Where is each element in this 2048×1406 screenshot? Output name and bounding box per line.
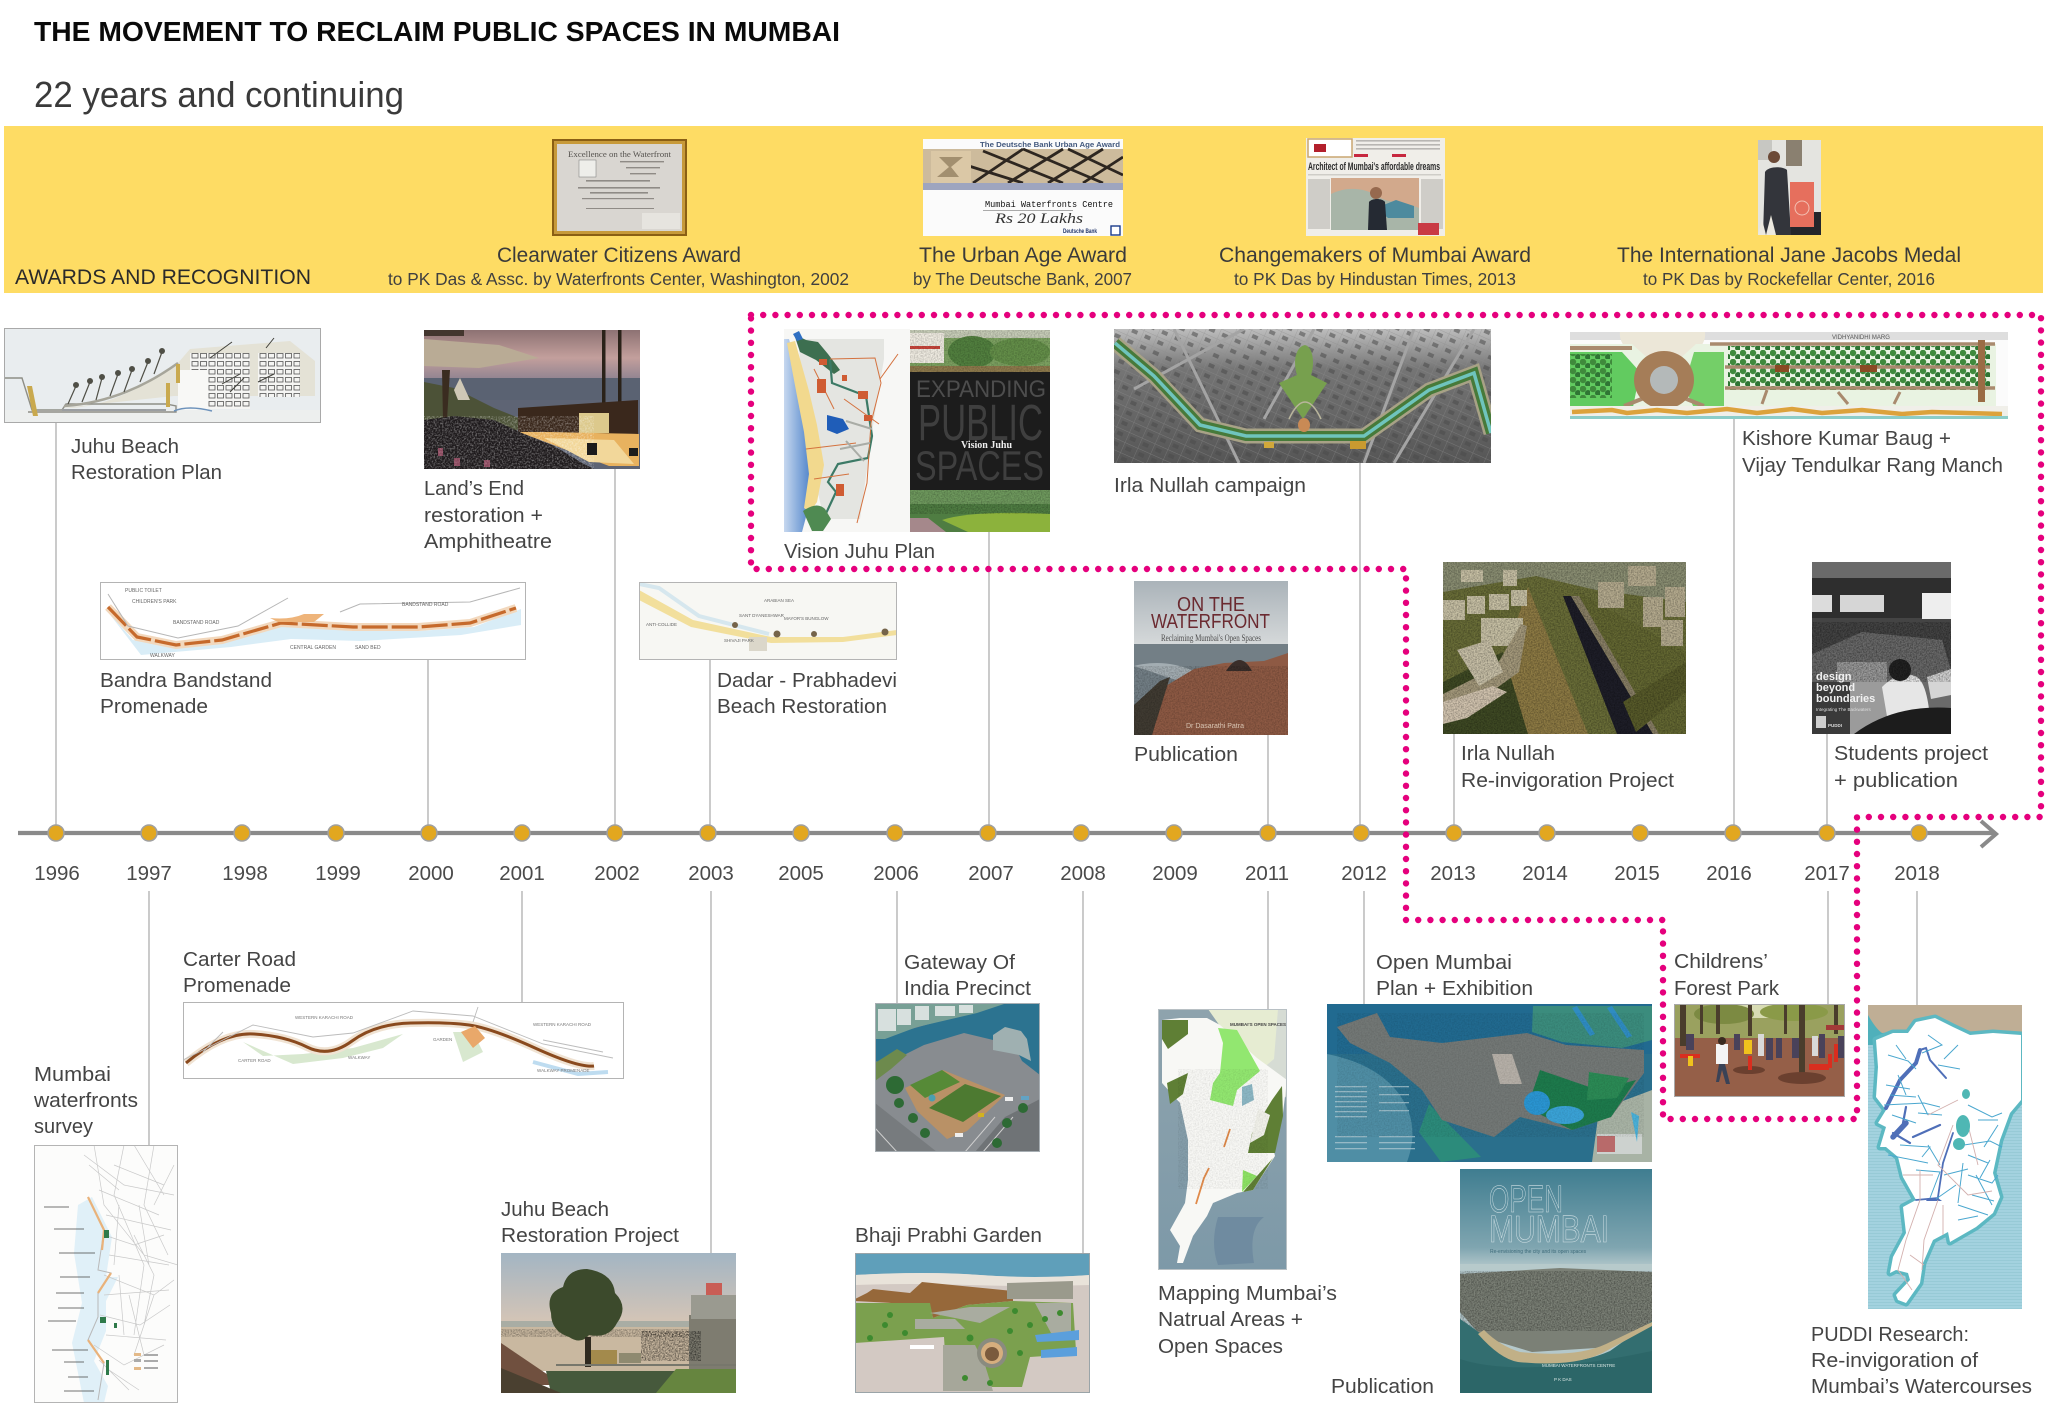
label: juhu beach restoration project [501, 1198, 679, 1247]
image: design beyond boundaries cover: Integrating The Backwaters [1816, 707, 1871, 712]
label: open mumbai plan + exhibition: Plan + Exhibition [1376, 977, 1533, 1000]
label: juhu beach restoration project: Juhu Beach [501, 1198, 609, 1221]
label: juhu beach restoration plan: Restoration Plan [71, 461, 222, 484]
label: publication on the waterfront: Publication [1134, 743, 1238, 766]
image: carter road promenade plan [183, 1002, 624, 1079]
label: students project: + publication [1834, 769, 1958, 792]
image: carter road promenade plan: WESTERN KARACHI ROAD [533, 1022, 592, 1027]
label: dadar prabhadevi: Beach Restoration [717, 695, 887, 718]
image: dadar prabhadevi beach: MAYOR'S BUNGLOW [784, 616, 829, 621]
image: dadar prabhadevi beach: SANT DYANESHWAR [739, 613, 785, 618]
image: bandra bandstand promenade [100, 582, 526, 660]
title: THE MOVEMENT TO RECLAIM PUBLIC SPACES IN MUMBAI [34, 16, 840, 47]
label: puddi research: Mumbai’s Watercourses [1811, 1375, 2032, 1398]
award image: urban age certificate: Deutsche Bank [1063, 229, 1098, 235]
label: kishore kumar baug: Vijay Tendulkar Rang Manch [1742, 454, 2003, 477]
label: kishore kumar baug [1742, 427, 2003, 477]
label: carter road promenade [183, 948, 296, 997]
image: bandra bandstand promenade: CHILDREN'S PARK [132, 599, 177, 605]
image: bandra bandstand promenade: WALKWAY [150, 653, 175, 659]
connector lines to timeline [56, 419, 1917, 1253]
label: irla nullah re-invigoration [1461, 742, 1674, 792]
subtitle: 22 years and continuing [34, 74, 404, 115]
image: carter road promenade plan: CARTER ROAD [238, 1058, 271, 1063]
label: open mumbai plan + exhibition: Open Mumbai [1376, 951, 1512, 974]
label: mapping mumbai's natural areas: Natrual Areas + [1158, 1308, 1303, 1331]
label: mapping mumbai's natural areas: Mapping Mumbai’s [1158, 1282, 1337, 1305]
award text: urban age: by The Deutsche Bank, 2007 [913, 269, 1132, 289]
label: students project: Students project [1834, 742, 1988, 765]
label: puddi research: PUDDI Research: [1811, 1323, 1969, 1346]
label: childrens' forest park: Childrens’ [1674, 950, 1768, 973]
label: bhaji prabhi garden: Bhaji Prabhi Garden [855, 1224, 1042, 1247]
label: bandra bandstand [100, 669, 272, 718]
award text: changemakers: Changemakers of Mumbai Award [1219, 243, 1531, 267]
image: bandra bandstand promenade: CENTRAL GARDEN [290, 645, 336, 651]
award text: changemakers [1219, 243, 1531, 289]
image: on the waterfront book: Reclaiming Mumbai's Open Spaces [1161, 633, 1261, 643]
label: bandra bandstand: Bandra Bandstand [100, 669, 272, 692]
award text: urban age: The Urban Age Award [919, 243, 1127, 267]
award text: jane jacobs: to PK Das by Rockefellar Center, 2016 [1643, 269, 1935, 289]
award image: framed certificate: Excellence on the Waterfront [568, 150, 672, 159]
timeline axis with arrow [18, 821, 1996, 847]
image: carter road promenade plan: WESTERN KARACHI ROAD [295, 1015, 354, 1020]
label: mumbai waterfronts survey: survey [34, 1115, 94, 1138]
image: design beyond boundaries cover: design [1816, 671, 1852, 683]
timeline year labels: 1997 [126, 862, 172, 885]
image: bandra bandstand promenade: BANDSTAND ROAD [402, 602, 449, 608]
award image: urban age certificate: Mumbai Waterfronts Centre [985, 200, 1113, 210]
label: open mumbai plan + exhibition [1376, 951, 1533, 1000]
timeline year labels: 1999 [315, 862, 361, 885]
label: mumbai waterfronts survey [33, 1063, 138, 1138]
timeline year labels: 2013 [1430, 862, 1476, 885]
image: dadar prabhadevi beach: ANTI-COLLIDE [646, 622, 677, 627]
award text: clearwater citizens [388, 243, 849, 289]
award image: urban age certificate: Rs 20 Lakhs [994, 211, 1083, 227]
image: puddi watercourses map [1868, 1005, 2022, 1309]
image: design beyond boundaries cover: beyond [1816, 682, 1855, 694]
image: on the waterfront book [1134, 581, 1288, 735]
label: juhu beach restoration project: Restoration Project [501, 1224, 679, 1247]
image: bandra bandstand promenade: PUBLIC TOILET [125, 588, 162, 594]
image: dadar prabhadevi beach [639, 582, 897, 660]
label: gateway of india precinct [904, 951, 1031, 1000]
label: juhu beach restoration plan [71, 435, 222, 484]
label: land's end: Amphitheatre [424, 530, 552, 553]
label: mapping mumbai's natural areas: Open Spaces [1158, 1335, 1283, 1358]
label: land's end [424, 477, 552, 553]
label: juhu beach restoration plan: Juhu Beach [71, 435, 179, 458]
label: kishore kumar baug: Kishore Kumar Baug + [1742, 427, 1951, 450]
awards heading: AWARDS AND RECOGNITION [15, 266, 311, 289]
award image: newspaper clipping [1306, 138, 1445, 236]
award text: jane jacobs: The International Jane Jacobs Medal [1617, 243, 1961, 267]
award text: clearwater citizens: to PK Das & Assc. by Waterfronts Center, Washington, 2002 [388, 269, 849, 289]
image: expanding public spaces book [910, 330, 1050, 532]
label: land's end: restoration + [424, 504, 543, 527]
label: gateway of india precinct: India Precinct [904, 977, 1031, 1000]
timeline year labels: 2002 [594, 862, 640, 885]
label: dadar prabhadevi: Dadar - Prabhadevi [717, 669, 897, 692]
timeline year labels: 2018 [1894, 862, 1940, 885]
award image: jane jacobs medal speaker [1758, 140, 1821, 235]
image: carter road promenade plan: WALKWAY [348, 1055, 370, 1060]
timeline year labels: 1996 [34, 862, 80, 885]
image: irla nullah campaign [1114, 329, 1491, 463]
timeline year labels: 2011 [1245, 862, 1289, 885]
image: mapping mumbai natural areas [1158, 1009, 1297, 1270]
award image: urban age certificate: The Deutsche Bank Urban Age Award [980, 142, 1120, 149]
image: bhaji prabhi garden render [855, 1253, 1090, 1393]
image: open mumbai plan map [1327, 1004, 1652, 1162]
timeline year labels: 2009 [1152, 862, 1198, 885]
label: students project [1834, 742, 1988, 792]
label: land's end: Land’s End [424, 477, 524, 500]
image: kishore kumar baug plan: VIDHYANIDHI MARG [1832, 335, 1890, 341]
image: kishore kumar baug plan [1570, 332, 2008, 419]
label: childrens' forest park: Forest Park [1674, 977, 1780, 1000]
image: design beyond boundaries cover: PUDDI [1828, 723, 1842, 728]
label: carter road promenade: Promenade [183, 974, 291, 997]
image: on the waterfront book: Dr Dasarathi Patra [1186, 723, 1244, 730]
image: expanding public spaces book: Vision Juhu [961, 440, 1012, 451]
award text: urban age [913, 243, 1132, 289]
image: open mumbai book cover: Re-envisioning the city and its open spaces [1490, 1249, 1587, 1255]
image: on the waterfront book: WATERFRONT [1151, 611, 1270, 633]
image: open mumbai book cover: MUMBAI [1489, 1209, 1609, 1251]
image: dadar prabhadevi beach: SHIVAJI PARK [724, 638, 754, 643]
label: childrens' forest park [1674, 950, 1780, 1000]
award text: changemakers: to PK Das by Hindustan Times, 2013 [1234, 269, 1516, 289]
label: mumbai waterfronts survey: waterfronts [33, 1089, 138, 1112]
image: open mumbai book cover: MUMBAI WATERFRONTS CENTRE [1542, 1363, 1615, 1368]
label: carter road promenade: Carter Road [183, 948, 296, 971]
award text: jane jacobs [1617, 243, 1961, 289]
panel: awards and recognition [4, 126, 2043, 293]
label: mapping mumbai's natural areas [1158, 1282, 1337, 1358]
award image: urban age certificate [923, 139, 1123, 236]
label: gateway of india precinct: Gateway Of [904, 951, 1015, 974]
label: irla nullah campaign: Irla Nullah campaign [1114, 474, 1306, 497]
image: irla nullah re-invigoration aerial [1443, 562, 1686, 734]
image: mapping mumbai natural areas: MUMBAI'S OPEN SPACES MAP [1230, 1022, 1297, 1027]
image: carter road promenade plan: GARDEN [433, 1037, 452, 1042]
timeline year labels: 2001 [499, 862, 545, 885]
label: mumbai waterfronts survey: Mumbai [34, 1063, 111, 1086]
timeline year labels [34, 862, 1940, 885]
timeline year labels: 2015 [1614, 862, 1660, 885]
image: gateway of india render [875, 1003, 1040, 1152]
label: puddi research [1811, 1323, 2032, 1398]
label: vision juhu plan: Vision Juhu Plan [784, 540, 935, 563]
label: publication open mumbai: Publication [1331, 1375, 1434, 1398]
timeline year labels: 2016 [1706, 862, 1752, 885]
image: mumbai waterfronts survey map [34, 1145, 178, 1403]
timeline year labels: 2012 [1341, 862, 1387, 885]
timeline year labels: 2008 [1060, 862, 1106, 885]
image: bandra bandstand promenade: BANDSTAND ROAD [173, 620, 220, 626]
image: carter road promenade plan: WALKWAY PROMENADE [537, 1068, 590, 1073]
image: bandra bandstand promenade: SAND BED [355, 645, 381, 651]
image: childrens forest park photo [1674, 1004, 1845, 1097]
timeline year labels: 2017 [1804, 862, 1850, 885]
image: juhu beach photo [501, 1253, 736, 1393]
timeline year labels: 2007 [968, 862, 1014, 885]
award text: clearwater citizens: Clearwater Citizens Award [497, 243, 741, 267]
label: irla nullah re-invigoration: Re-invigoration Project [1461, 769, 1674, 792]
image: open mumbai book cover: P K DAS [1554, 1377, 1572, 1382]
award image: framed certificate [552, 139, 687, 236]
image: design beyond boundaries cover [1812, 562, 1951, 734]
label: irla nullah re-invigoration: Irla Nullah [1461, 742, 1555, 765]
timeline year labels: 2014 [1522, 862, 1568, 885]
image: dadar prabhadevi beach: ARABIAN SEA [764, 598, 794, 603]
image: design beyond boundaries cover: boundaries [1816, 693, 1875, 705]
image: vision juhu plan map [784, 329, 910, 532]
image: juhu beach restoration plan [4, 328, 321, 423]
image: open mumbai book cover: OPEN [1489, 1179, 1563, 1221]
image: open mumbai book cover [1460, 1169, 1652, 1393]
timeline year labels: 2006 [873, 862, 919, 885]
image: on the waterfront book: ON THE [1177, 594, 1245, 616]
image: land's end amphitheatre [424, 330, 640, 469]
dotted magenta boundary [751, 315, 2041, 1119]
timeline year markers [48, 825, 1927, 841]
timeline year labels: 1998 [222, 862, 268, 885]
timeline year labels: 2003 [688, 862, 734, 885]
timeline year labels: 2005 [778, 862, 824, 885]
label: dadar prabhadevi [717, 669, 897, 718]
label: bandra bandstand: Promenade [100, 695, 208, 718]
timeline year labels: 2000 [408, 862, 454, 885]
label: puddi research: Re-invigoration of [1811, 1349, 1978, 1372]
